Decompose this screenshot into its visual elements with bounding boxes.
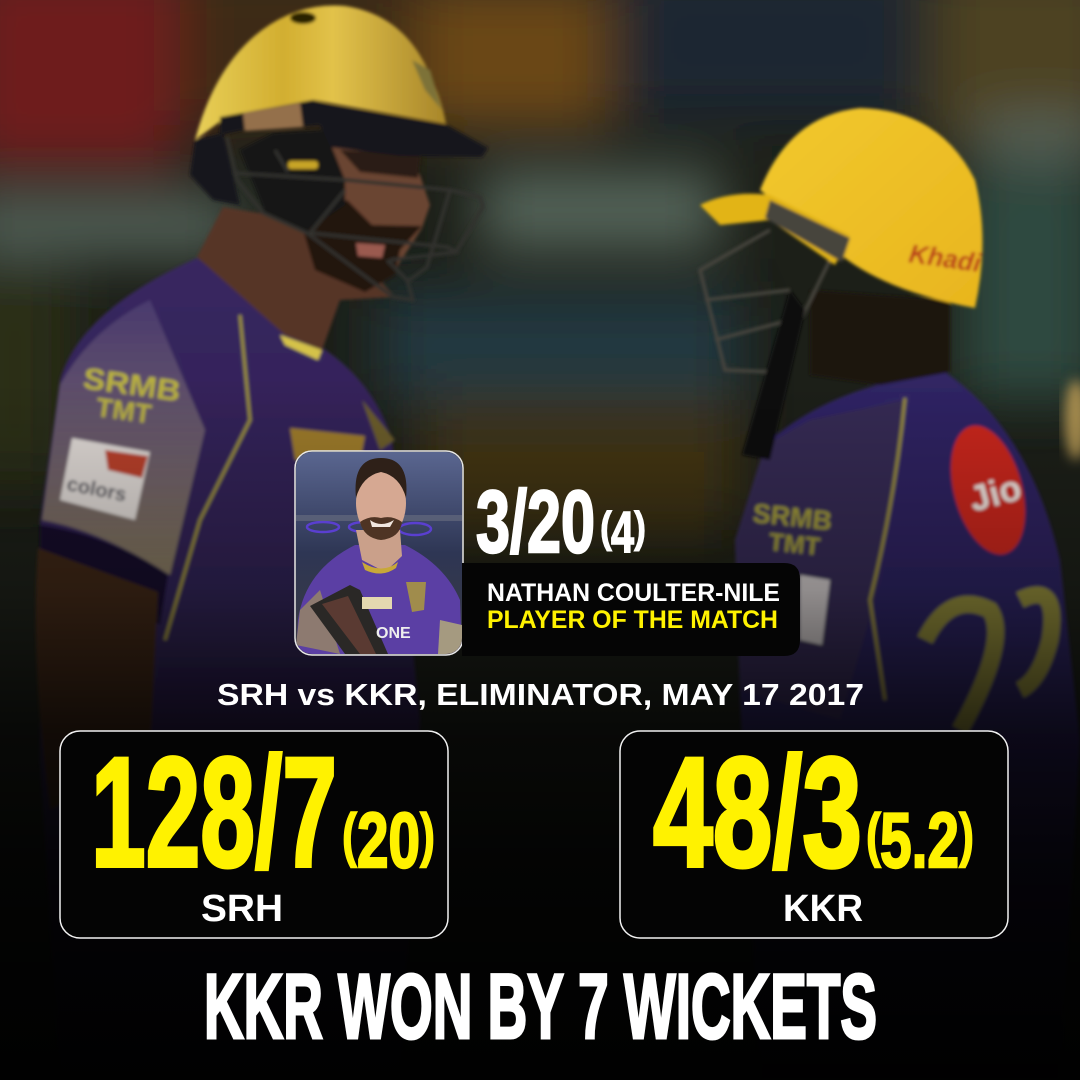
right player jersey: [735, 372, 1080, 1080]
SRH score panel: 128/7: [91, 726, 337, 900]
trophy: [310, 585, 388, 654]
left player jersey: [40, 258, 420, 1080]
warm glow behind stat: [464, 452, 704, 564]
KKR score panel: (: [866, 802, 881, 868]
player portrait photo: ONE: [376, 625, 411, 642]
stat figure: 4: [611, 500, 634, 565]
Khadim logo: Khadi: [907, 238, 984, 278]
right helmet grille: [700, 230, 830, 372]
left helmet brim: [220, 100, 488, 157]
sleeve sponsors: SRMB: [751, 498, 834, 536]
sleeve sponsor logos: SRMB: [81, 362, 183, 409]
player right: Jio: [965, 466, 1026, 520]
match subtitle: SRH vs KKR, ELIMINATOR, MAY 17 2017: [217, 677, 864, 712]
left helmet dome: [195, 6, 446, 140]
player of the match label: PLAYER OF THE MATCH: [487, 606, 778, 634]
KKR score panel: KKR: [783, 888, 863, 930]
SRH score panel: (: [342, 802, 357, 868]
left player sleeve: [42, 300, 205, 575]
bottom dark fade: [0, 380, 1080, 1080]
player right: [700, 108, 1080, 1080]
left player face: [280, 147, 430, 292]
left player neck: [197, 207, 395, 350]
stat figure: 3/20: [476, 472, 595, 571]
player of the match label: [462, 563, 800, 656]
KKR score panel: 5.2: [880, 796, 959, 884]
stat figure: ): [634, 503, 646, 552]
Jio logo: [938, 417, 1038, 563]
player left: [36, 6, 488, 1080]
player portrait photo: [295, 451, 463, 655]
player of the match label: NATHAN COULTER-NILE: [487, 579, 780, 607]
stat figure: (: [600, 503, 612, 552]
left player arm: [36, 548, 158, 810]
KKR score panel: ): [959, 802, 974, 868]
SRH score panel: SRH: [201, 888, 283, 930]
KKR score panel: 48/3: [653, 726, 862, 900]
left helmet ear pad: [190, 133, 240, 205]
right player neck: [810, 290, 950, 385]
player left: colors: [65, 473, 128, 506]
KKR score panel: [620, 726, 1008, 938]
player left: TMT: [94, 392, 154, 430]
left helmet grille: [227, 137, 483, 300]
SRH score panel: 20: [357, 796, 420, 884]
right helmet cap: [760, 108, 982, 308]
SRH score panel: ): [420, 802, 435, 868]
player right: TMT: [767, 528, 821, 561]
jersey number: [925, 595, 1052, 730]
